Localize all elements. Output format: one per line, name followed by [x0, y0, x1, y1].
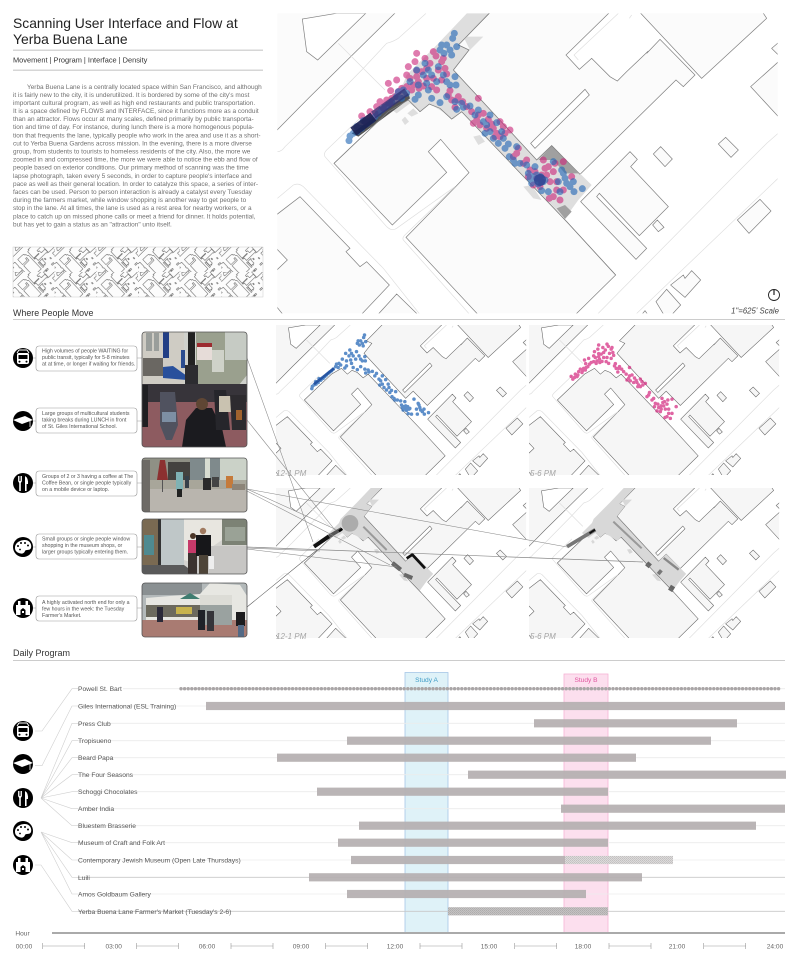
callout 2: students: taking breaks during LUNCH in front: [42, 418, 127, 424]
row labels: Beard Papa: [78, 755, 114, 762]
body text: faces can be used. Person to person interaction is already a catalyst every Tuesday: [13, 189, 253, 196]
row labels: Yerba Buena Lane Farmer's Market (Tuesday's 2-6): [78, 909, 231, 916]
callout 5: market: Farmer's Market.: [42, 613, 82, 619]
callout 4: window shopping: [13, 534, 142, 559]
callout 4: window shopping: larger groups typically entering them.: [42, 550, 128, 556]
study window A: Study A: [415, 677, 438, 684]
callout 2: students: Large groups of multicultural students: [42, 411, 130, 417]
title: Scanning User Interface and Flow at: [13, 15, 238, 31]
callout 1: transit: at at time, or longer if waiting for friends.: [42, 361, 135, 367]
row labels: Amos Goldbaum Gallery: [78, 892, 152, 898]
hour axis: Hour: [15, 930, 30, 938]
icon: food: [13, 788, 33, 808]
callout 3: coffee: Coffee Bean, or single people typically: [42, 480, 132, 486]
connectors from icons to program rows: [35, 689, 78, 911]
callout 3: coffee: on a mobile device or laptop.: [42, 487, 109, 493]
callout 1: transit: High volumes of people WAITING for: [42, 348, 128, 354]
body text: it is fairly new to the city, it is underutilized. It is bordered by some of the city's most: [13, 92, 250, 99]
hour axis: 12:00: [387, 943, 404, 950]
row labels: Tropisueno: [78, 738, 111, 745]
hour axis: [15, 930, 785, 950]
body text: tion that frequents the lane, typically people who work in the area and use it as a short-: [13, 132, 261, 139]
study window B: [564, 674, 608, 933]
hour axis: 09:00: [293, 943, 310, 950]
map: 5-6 PM density: [529, 488, 780, 639]
hour axis: 03:00: [105, 943, 122, 950]
callout 4: window shopping: shopping in the museum shops, or: [42, 543, 123, 549]
icon: transit: [13, 721, 33, 741]
photo: coffee shop terrace: [142, 458, 247, 512]
callout 1: transit: public transit, typically for 5-8 minutes: [42, 355, 130, 361]
bars: opening hours: [206, 702, 786, 915]
callout 2: students: [13, 408, 142, 433]
hour axis: 18:00: [575, 943, 592, 950]
icon: market: [13, 855, 33, 875]
map: 12-1 PM density: 12-1 PM: [276, 632, 307, 641]
row labels: Contemporary Jewish Museum (Open Late Thursdays): [78, 858, 241, 864]
row labels: [77, 683, 241, 916]
photo: crowd at transit stop: [142, 332, 247, 447]
body text: people based on exterior conditions. Our primary method of scanning was the time: [13, 165, 249, 172]
row labels: Museum of Craft and Folk Art: [78, 840, 165, 847]
body text: stop in the lane. At all times, the lane is used as a rest area for nearby workers, or a: [13, 205, 252, 212]
hour axis: 00:00: [16, 943, 33, 950]
hour axis: 06:00: [199, 943, 216, 950]
callout 5: market: [13, 596, 142, 621]
body text: lapse photograph, taken every 5 seconds, in order to capture people's interface and: [13, 173, 252, 180]
title: [13, 15, 238, 47]
body text: tion and time of day. For instance, during lunch there is a more homogenous popula-: [13, 124, 254, 131]
map: 12-1 PM blue dots: 12-1 PM: [276, 469, 307, 478]
row labels: Giles International (ESL Training): [78, 704, 176, 710]
program rows chart: [77, 683, 786, 916]
subtitle: themes: Movement | Program | Interface | Density: [13, 56, 148, 64]
callout 4: window shopping: Small groups or single people window: [42, 536, 130, 542]
main map: combined movement scan: [263, 0, 785, 317]
row labels: Luili: [78, 875, 90, 882]
photo: farmers market: [142, 583, 247, 637]
icon: north clock: [768, 290, 780, 300]
callout 2: students: of St. Giles International School.: [42, 424, 117, 430]
body text: [13, 84, 262, 228]
map: 5-6 PM pink dots: 5-6 PM: [530, 469, 556, 478]
study window A: [405, 672, 448, 933]
heading: daily program: Daily Program: [13, 648, 70, 658]
scale label: 1"=625' Scale: [731, 306, 780, 316]
body text: Yerba Buena Lane is a centrally located space within San Francisco, and although: [27, 84, 262, 91]
body text: It is a space defined by FLOWS and INTERFACE, since it functions more as a conduit: [13, 108, 259, 115]
icon: art: [13, 821, 33, 841]
map: 5-6 PM pink dots: [529, 325, 780, 476]
body text: cut to Yerba Buena Gardens across mission. In the evening, there is a more diverse: [13, 140, 252, 147]
pattern strip of repeated scan maps: [13, 247, 263, 297]
body text: pace as well as their general location. In order to catalyze this space, a series of inter-: [13, 181, 258, 188]
hour axis: 21:00: [669, 943, 686, 950]
hour axis: 24:00: [767, 943, 784, 950]
map: 5-6 PM density: 5-6 PM: [530, 632, 556, 641]
row labels: Schoggi Chocolates: [78, 789, 138, 796]
row labels: Press Club: [78, 721, 111, 728]
body text: but has yet to gain a status as an "attraction" unto itself.: [13, 221, 172, 228]
row labels: Amber India: [78, 806, 114, 813]
row labels: The Four Seasons: [78, 772, 134, 779]
study window B: Study B: [574, 677, 598, 684]
body text: during the farmers market, while window shopping is another way to get people to: [13, 197, 247, 204]
callout 3: coffee: Groups of 2 or 3 having a coffee at The: [42, 474, 133, 480]
bar: Powell St. Bart service: [181, 687, 782, 690]
map: 12-1 PM density: [276, 488, 526, 639]
row labels: Bluestem Brasserie: [78, 823, 136, 830]
row labels: Powell St. Bart: [78, 686, 122, 693]
icon: student: [13, 754, 33, 774]
callout 5: market: few hours in the week: the Tuesday: [42, 606, 125, 612]
body text: than an attractor. Flows occur at many scales, defined primarily by public transporta-: [13, 116, 254, 123]
title: Yerba Buena Lane: [13, 31, 128, 47]
leader lines from photos to maps: [247, 358, 643, 607]
body text: zoomed in and compressed time, the more we were able to notice the ebb and flow of: [13, 157, 258, 164]
hour axis: 15:00: [481, 943, 498, 950]
heading: where people move: Where People Move: [13, 308, 93, 318]
callout 1: transit: [13, 346, 142, 371]
body text: group, from students to tourists to homeless residents of the city. Also, the more we: [13, 148, 251, 156]
photo: window shoppers: [142, 519, 247, 574]
map: 12-1 PM blue dots: [276, 325, 526, 476]
body text: place to catch up on missed phone calls or meet a friend for dinner. It holds potential,: [13, 213, 256, 220]
callout 5: market: A highly activated north end for only a: [42, 600, 130, 606]
callout 3: coffee: [13, 471, 142, 496]
body text: important cultural program, as well as high end restaurants and public transportation.: [13, 100, 255, 107]
